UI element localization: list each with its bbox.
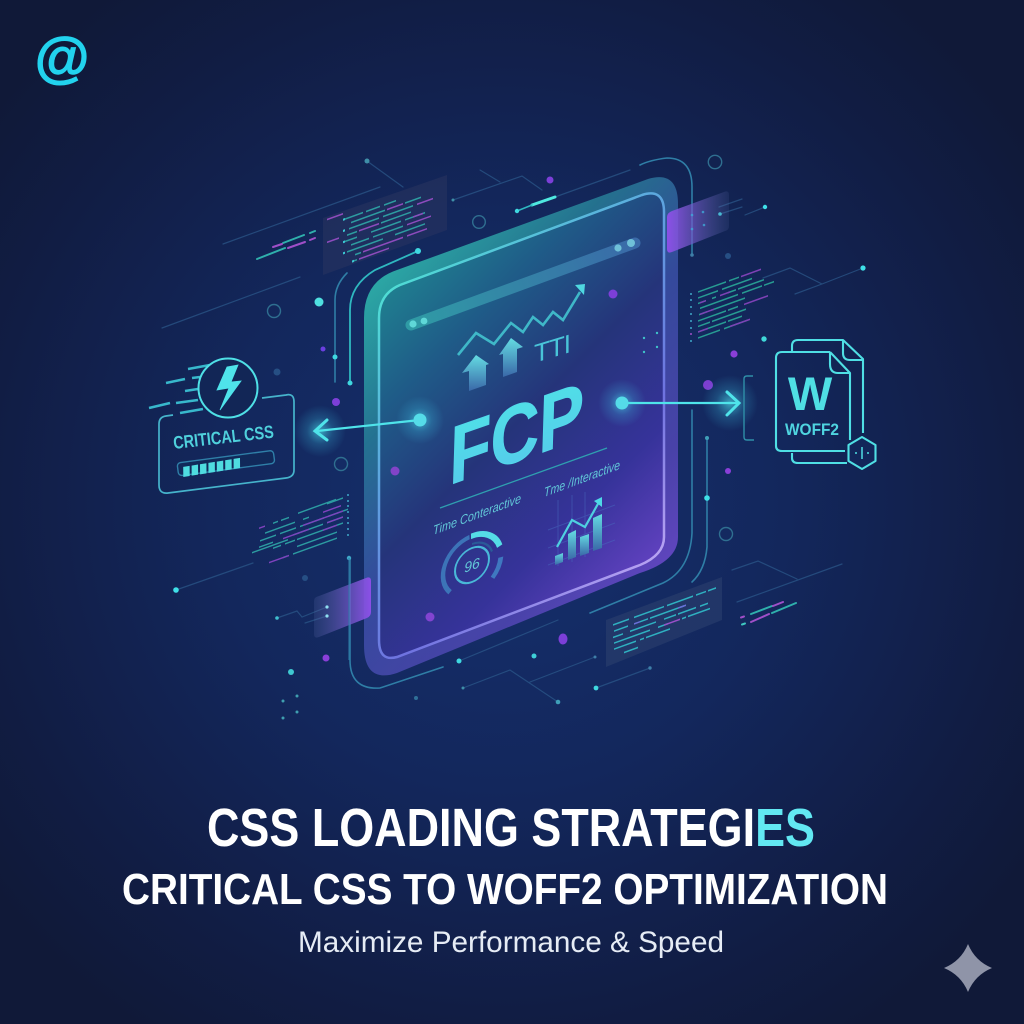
panel inner face bbox=[379, 193, 664, 658]
back document bbox=[792, 340, 863, 463]
code panel: bottom right bbox=[606, 577, 722, 667]
card outline bbox=[159, 395, 294, 493]
code panel: top left bbox=[323, 175, 447, 275]
code snippet: lower right bbox=[741, 602, 796, 624]
particles bbox=[173, 158, 866, 720]
subtitle: Maximize Performance & Speed bbox=[298, 926, 724, 959]
critical css label: CRITICAL CSS bbox=[172, 422, 275, 453]
bracket bbox=[744, 376, 754, 440]
up arrows bbox=[462, 338, 523, 391]
trend line with arrow bbox=[458, 284, 585, 355]
panel outer band bbox=[364, 177, 678, 675]
divider bbox=[440, 448, 607, 508]
gauge value: 96 bbox=[464, 555, 481, 577]
logo: at sign icon: @ bbox=[35, 25, 89, 88]
ring markers bbox=[268, 155, 732, 541]
arrow: panel to woff2 bbox=[598, 375, 758, 431]
woff2 label: WOFF2 bbox=[785, 420, 839, 439]
progress bar bbox=[177, 450, 275, 477]
address bar bbox=[409, 239, 635, 328]
FCP label: FCP bbox=[448, 364, 585, 502]
gauge bbox=[443, 525, 501, 596]
icon: sparkle bbox=[944, 944, 992, 992]
woff2 file icon bbox=[744, 340, 876, 469]
icon: lightning bolt badge bbox=[198, 358, 258, 418]
front document bbox=[776, 352, 850, 451]
code snippet: upper left bbox=[257, 231, 315, 259]
W glyph: W bbox=[788, 367, 833, 420]
speed lines bbox=[149, 365, 210, 413]
time label left: Time Conteractive bbox=[433, 491, 521, 538]
circuit traces and particles bbox=[162, 158, 863, 702]
title line 2: CRITICAL CSS TO WOFF2 OPTIMIZATION bbox=[122, 865, 888, 914]
translucent tab: bottom left bbox=[314, 558, 371, 660]
TTI label: TTI bbox=[534, 328, 571, 369]
title line 1: CSS LOADING STRATEGIES bbox=[207, 798, 815, 858]
code snippet: mid left bbox=[252, 494, 349, 569]
arrow: panel to critical css bbox=[294, 396, 444, 457]
panel dots bbox=[390, 290, 658, 622]
main glass panel bbox=[364, 177, 678, 675]
bar chart bbox=[548, 492, 615, 566]
title block bbox=[122, 798, 888, 959]
critical css card bbox=[149, 358, 294, 493]
code snippet: right bbox=[690, 265, 774, 342]
time label right: Tme /Interactive bbox=[544, 457, 620, 500]
hexagon badge bbox=[848, 437, 876, 469]
translucent tab: top right bbox=[667, 191, 729, 253]
